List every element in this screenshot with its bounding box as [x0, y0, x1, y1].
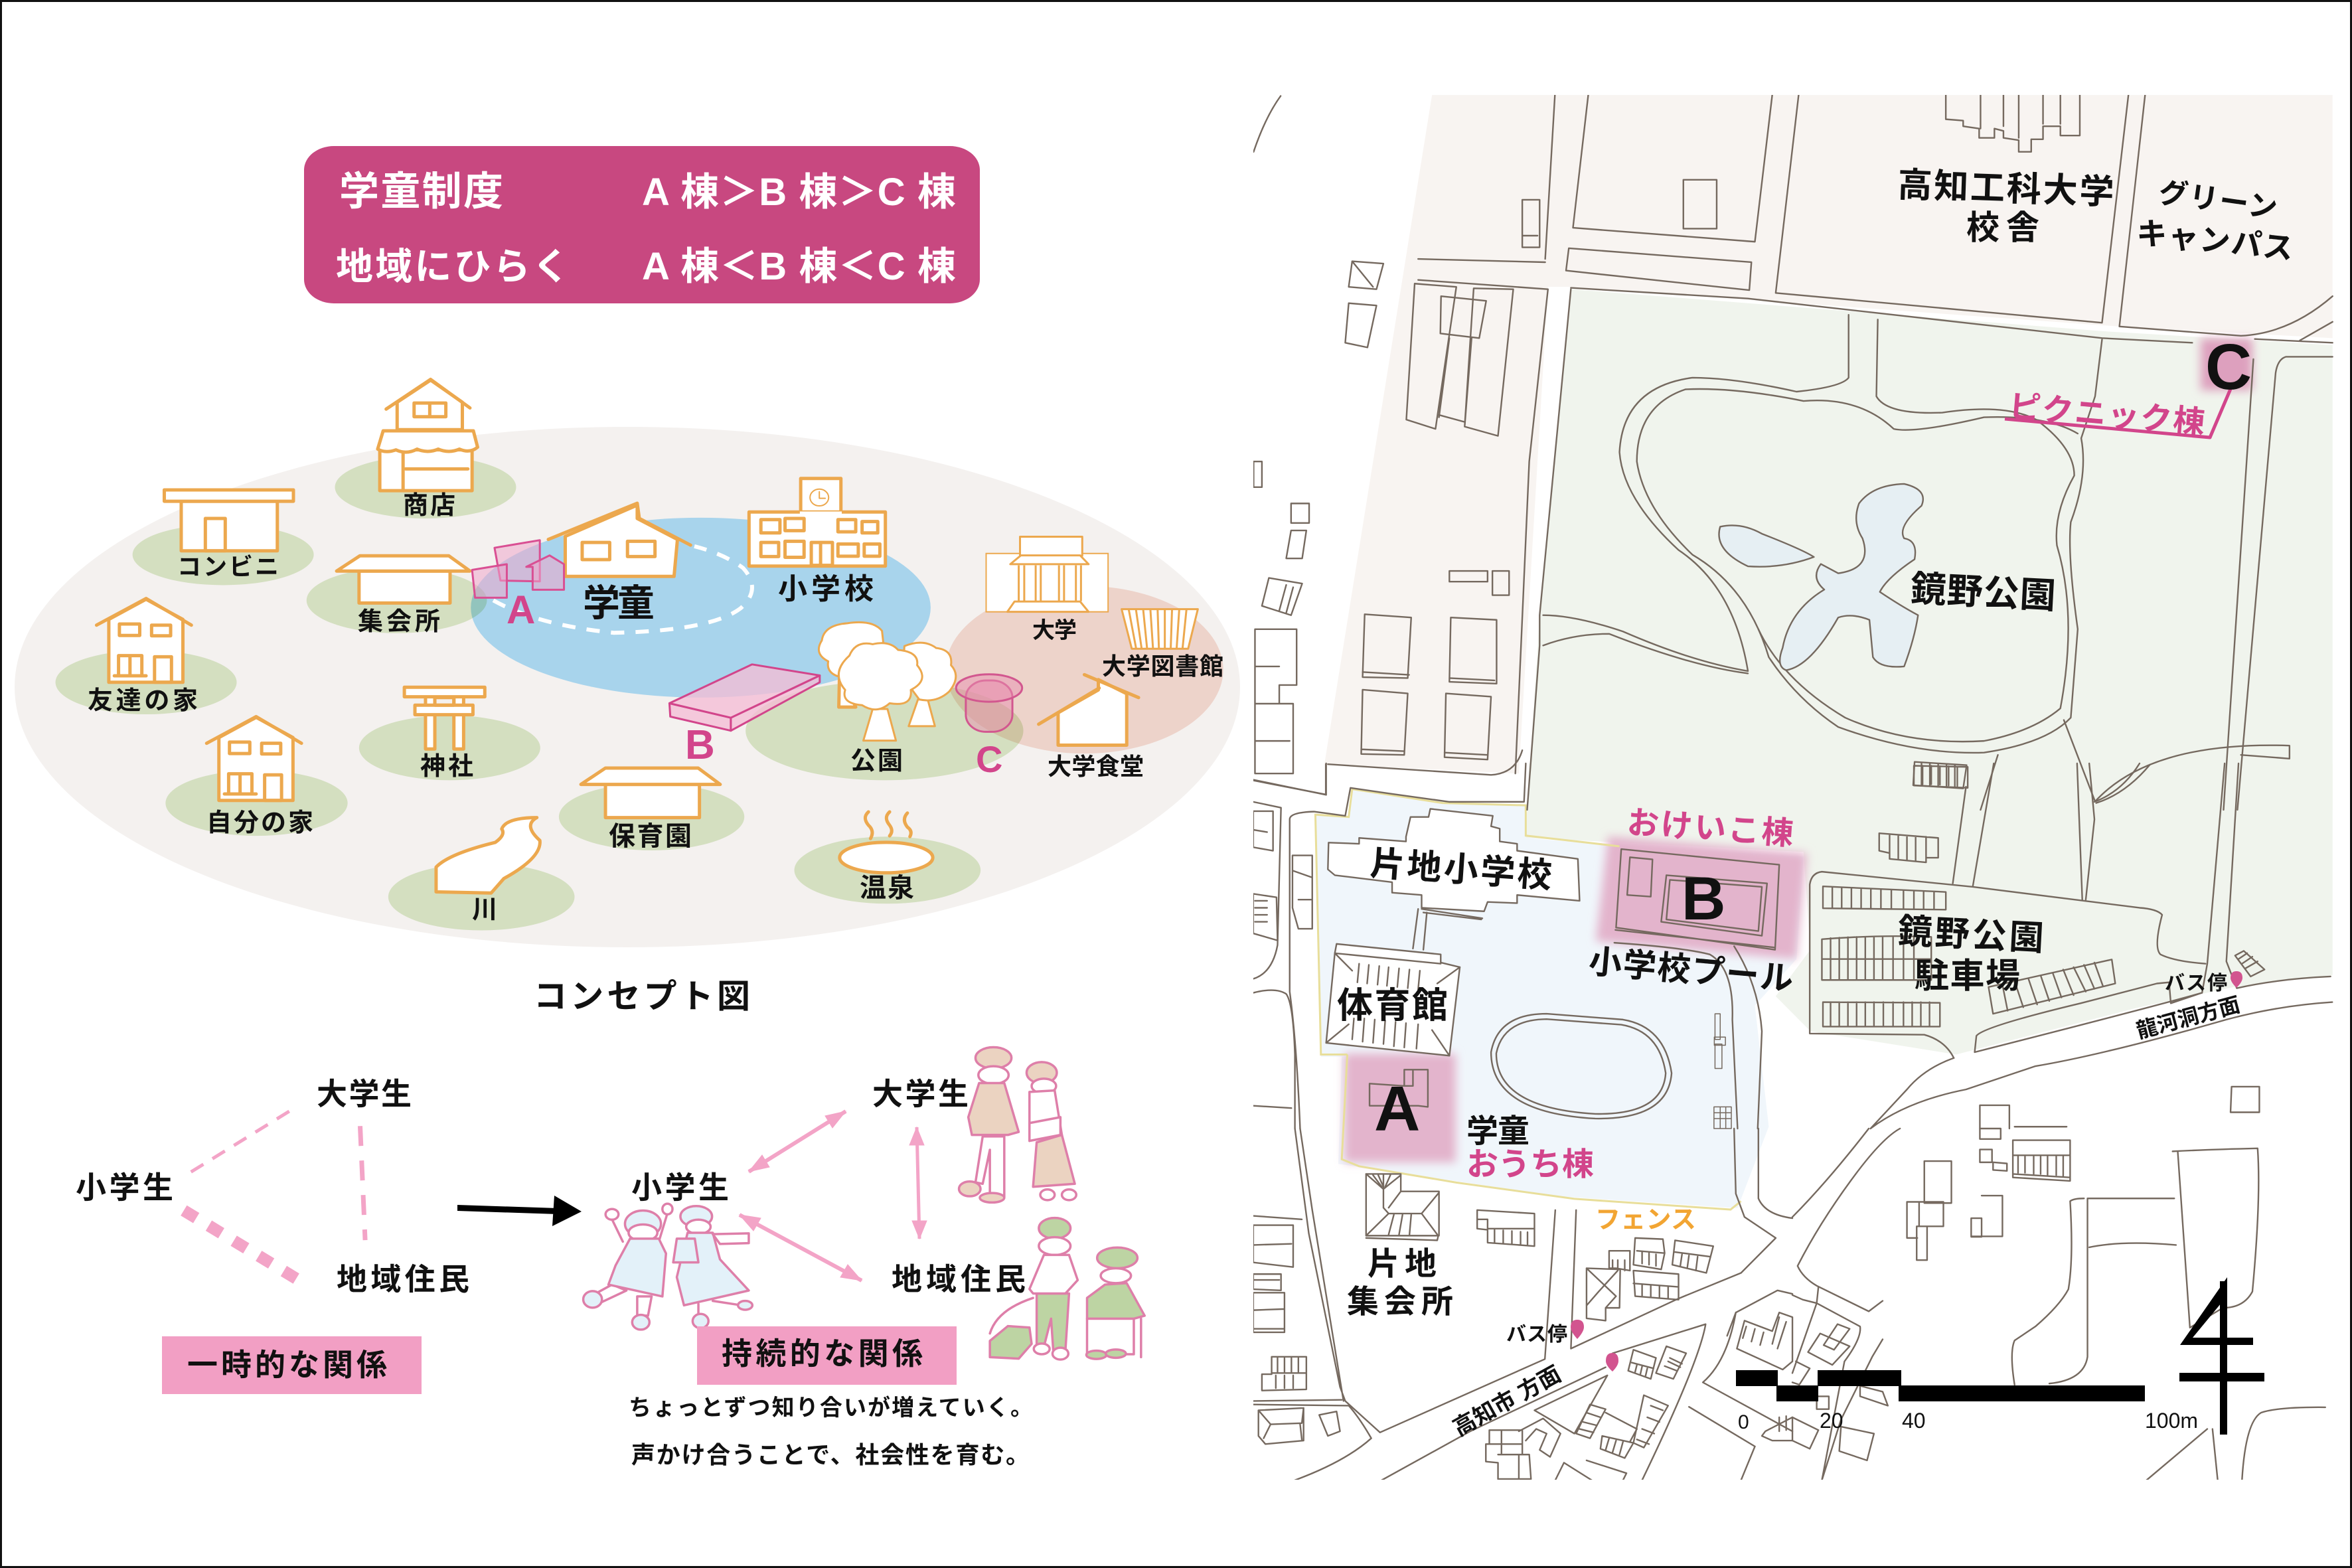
north arrow	[2179, 1277, 2264, 1435]
icon: elementary school	[749, 479, 886, 566]
panel: policy banner	[304, 146, 980, 303]
concept labels: 集会所	[358, 608, 440, 636]
right half of concept icons	[669, 479, 1223, 873]
illustration: university students	[959, 1047, 1076, 1202]
arrow: from temporary to sustained	[457, 1196, 582, 1226]
map labels: 鏡野公園	[1897, 912, 2045, 958]
gymnasium	[1326, 944, 1460, 1056]
panel: sustained relationship diagram: 小学生	[631, 1170, 729, 1205]
panel: temporary relationship diagram: 一時的な関係	[187, 1348, 387, 1382]
panel: temporary relationship diagram: 小学生	[76, 1170, 173, 1205]
icon: university cafeteria	[1039, 674, 1138, 745]
map labels: バス停	[1506, 1324, 1567, 1346]
concept labels: 大学図書館	[1102, 653, 1223, 680]
park paths	[1543, 315, 1849, 671]
concept labels: 公園	[850, 747, 903, 775]
map labels: 片地小学校	[1369, 844, 1553, 896]
running track	[1491, 1014, 1672, 1119]
icon: friend's house	[96, 599, 191, 682]
map labels: C	[2205, 331, 2252, 403]
neighbourhood ground ellipses	[56, 456, 1024, 930]
panel: sustained relationship diagram: 大学生	[872, 1077, 969, 1111]
concept diagram caption: コンセプト図	[534, 978, 750, 1015]
bus stop pins	[1571, 971, 2242, 1372]
concept labels: 学童	[583, 582, 655, 624]
icon: building C picnic tent	[956, 674, 1022, 732]
icon: own house	[206, 716, 301, 801]
icon: shrine gate	[404, 687, 485, 749]
map labels: B	[1682, 865, 1725, 933]
sentence 2: 声かけ合うことで、社会性を育む。	[631, 1441, 1030, 1468]
upper map linework	[1253, 95, 2333, 810]
school zone ellipse	[471, 518, 931, 698]
icon: hot spring	[840, 812, 933, 873]
panel: temporary relationship diagram: 地域住民	[337, 1262, 469, 1296]
icon: university library	[1122, 609, 1198, 649]
panel: sustained relationship diagram: 持続的な関係	[722, 1336, 923, 1371]
concept labels: A	[507, 588, 535, 632]
buildings north-west	[1522, 180, 1717, 248]
scale bar	[1736, 1370, 2198, 1433]
houses east of bus stop	[1634, 1238, 1665, 1269]
left half of concept icons	[56, 379, 1024, 930]
icon: gakudo house	[548, 503, 690, 576]
building A footprint	[1370, 1069, 1428, 1107]
concept labels: C	[976, 738, 1002, 780]
map labels	[1337, 166, 2295, 1441]
icon: park trees	[819, 622, 956, 741]
illustration: children	[584, 1204, 752, 1330]
concept labels: B	[685, 722, 715, 768]
fence line	[1315, 789, 1741, 1210]
panel: temporary relationship diagram: 大学生	[317, 1077, 412, 1111]
swimming pool	[1615, 849, 1779, 950]
map labels: 体育館	[1337, 986, 1448, 1026]
map labels: おうち棟	[1466, 1147, 1594, 1182]
panel: sustained relationship diagram	[584, 1047, 1144, 1468]
map labels: フェンス	[1595, 1206, 1696, 1234]
weak dashed links	[184, 1110, 365, 1285]
lower-left map linework: school	[1253, 763, 1779, 1129]
lower-left map linework: streets and houses	[1253, 1129, 1792, 1480]
map labels: ピクニック棟	[2007, 389, 2207, 441]
community ellipse	[15, 427, 1240, 947]
icon: river	[436, 818, 540, 893]
concept labels	[88, 492, 1223, 924]
concept labels: 大学食堂	[1048, 753, 1144, 780]
panel: policy banner: A 棟＞B 棟＞C 棟	[642, 171, 956, 214]
icon: community hall	[337, 556, 470, 603]
map labels: 集会所	[1347, 1285, 1453, 1320]
picnic leader line	[2005, 389, 2231, 437]
panel: policy banner: 地域にひらく	[336, 246, 570, 287]
icon: shop	[378, 379, 477, 491]
label box: temporary	[162, 1336, 422, 1394]
label box: sustained	[697, 1326, 957, 1385]
scale bar: 20	[1820, 1409, 1843, 1433]
panel: temporary relationship diagram	[76, 1077, 469, 1394]
map labels: 龍河洞方面	[2134, 992, 2242, 1043]
panel: concept diagram	[15, 379, 1240, 947]
concept labels: 神社	[420, 753, 473, 781]
car park bays	[1823, 886, 1946, 909]
panel: policy banner: 学童制度	[339, 169, 503, 214]
scale bar: 40	[1902, 1409, 1926, 1433]
concept labels: 川	[472, 896, 497, 924]
illustration: local residents with dog	[990, 1218, 1144, 1360]
icon: nursery	[581, 768, 720, 818]
dashed gakudo boundary	[493, 546, 752, 633]
concept labels: 温泉	[860, 874, 914, 903]
concept labels: 友達の家	[88, 687, 198, 715]
concept labels: 小学校	[778, 573, 874, 605]
map labels: 学童	[1466, 1114, 1529, 1149]
map labels: 高知市 方面	[1449, 1362, 1565, 1441]
icon: convenience store	[164, 490, 293, 551]
pink double arrows	[740, 1111, 927, 1281]
icon: building A cluster	[472, 540, 564, 597]
scale bar: 100m	[2145, 1409, 2198, 1433]
map labels: A	[1374, 1073, 1420, 1144]
map labels: 駐車場	[1915, 957, 2020, 996]
map labels: グリーン	[2157, 176, 2280, 225]
highlighted building zones	[1344, 339, 2252, 1162]
icon: building B pool block	[669, 665, 820, 731]
concept labels: 大学	[1032, 618, 1077, 643]
map labels: 片地	[1368, 1247, 1437, 1282]
lower-right map linework: south-east plots	[1792, 1129, 2325, 1480]
map labels: 高知工科大学	[1897, 166, 2114, 212]
sentence 1: ちょっとずつ知り合いが増えていく。	[629, 1395, 1033, 1421]
pond	[1719, 484, 1923, 670]
panel: policy banner: A 棟＜B 棟＜C 棟	[642, 245, 956, 288]
concept labels: 自分の家	[206, 809, 313, 837]
concept labels: 商店	[403, 492, 455, 520]
map labels: 小学校プール	[1587, 943, 1795, 998]
panel: sustained relationship diagram: 地域住民	[892, 1262, 1026, 1296]
concept labels: コンビニ	[177, 553, 279, 580]
panel: site map	[1253, 95, 2333, 1480]
map area tints	[1315, 95, 2333, 1208]
university zone ellipse	[945, 586, 1223, 753]
lower-right map linework: parking	[1810, 763, 2332, 1129]
concept labels: 保育園	[609, 822, 692, 851]
icon: university	[986, 537, 1108, 612]
scale bar: 0	[1738, 1411, 1749, 1433]
map labels: バス停	[2165, 973, 2227, 994]
map labels: キャンパス	[2135, 215, 2295, 266]
elementary school building	[1328, 809, 1579, 911]
community hall roof	[1366, 1174, 1439, 1240]
map labels: おけいこ棟	[1626, 805, 1794, 852]
map labels: 校舎	[1966, 209, 2039, 246]
map labels: 鏡野公園	[1909, 569, 2057, 616]
